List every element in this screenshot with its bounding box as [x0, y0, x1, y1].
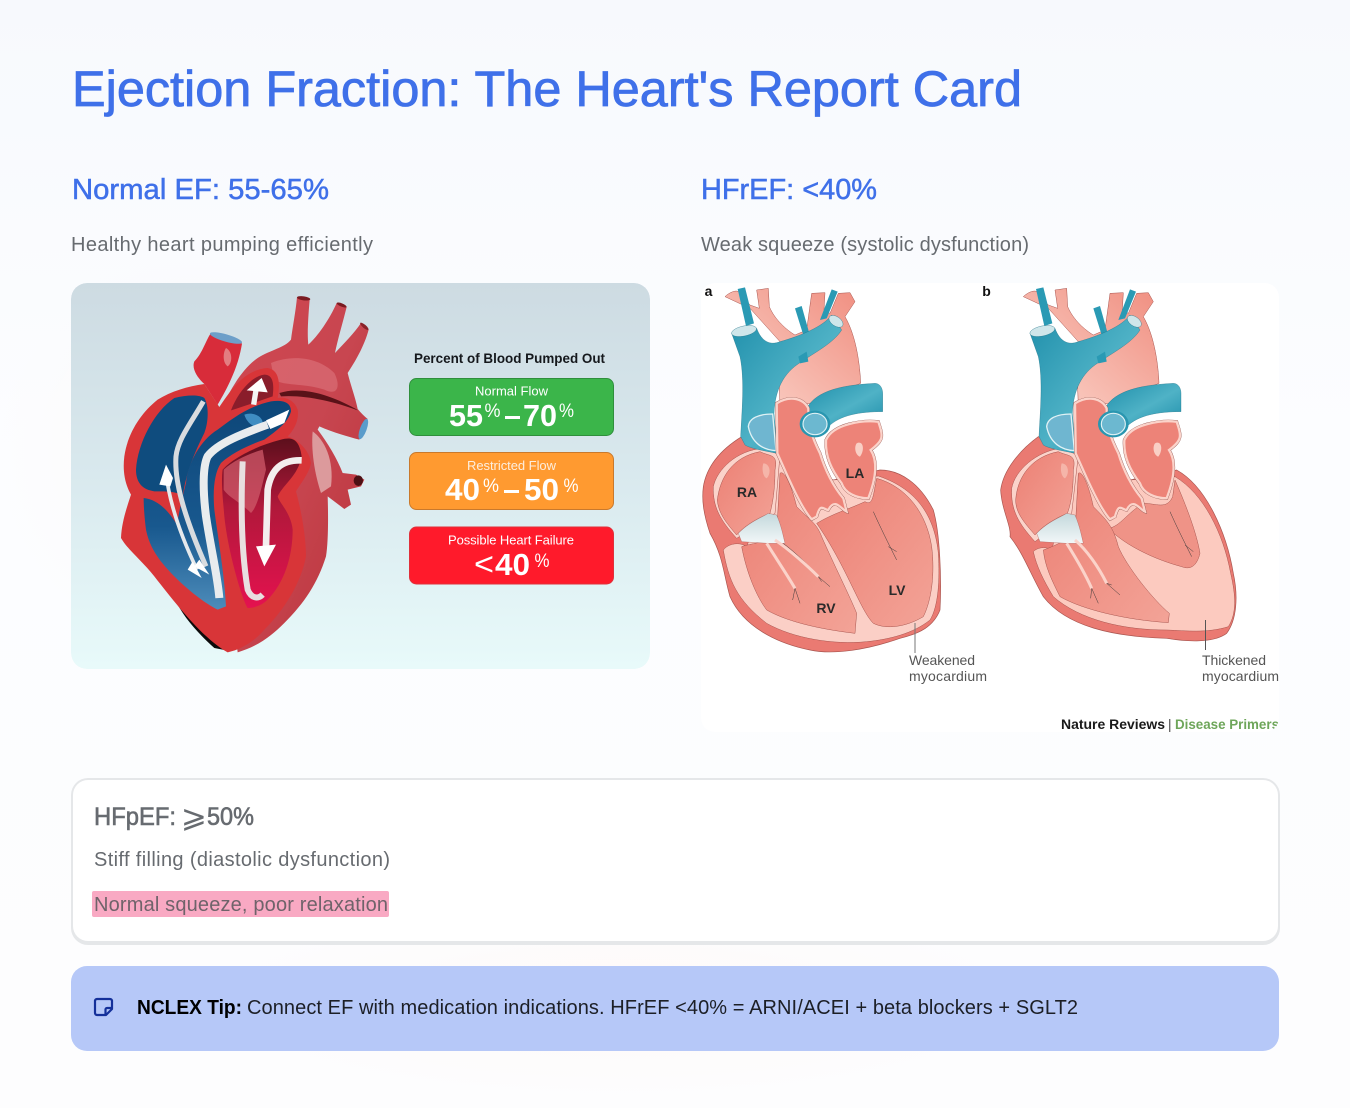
- badge: restricted flow: [410, 452, 614, 510]
- icon: sticky note: [95, 999, 112, 1015]
- badge: normal flow: %: [559, 401, 574, 422]
- heading: HFpEF: [94, 799, 254, 835]
- badge: possible heart failure: [410, 527, 614, 584]
- text: tip label: NCLEX Tip:: [137, 997, 242, 1019]
- labels: chambers: LV: [889, 582, 906, 598]
- text: tip body: Connect EF with medication indications. HFrEF <40% = ARNI/ACEI + beta blockers + SGLT2: [247, 997, 1078, 1019]
- badge: possible heart failure: Possible Heart Failure: [448, 532, 574, 548]
- text: HFpEF description: Stiff filling (diastolic dysfunction): [94, 849, 390, 871]
- credit: Nature Reviews: [1062, 719, 1278, 732]
- labels: chambers: [705, 283, 991, 616]
- caption: thickened myocardium: [1202, 652, 1279, 684]
- credit: Nature Reviews: Disease Primers: [1175, 717, 1279, 732]
- image panel: heart diagrams: [701, 283, 1279, 732]
- highlight: normal squeeze, poor relaxation: Normal squeeze, poor relaxation: [94, 894, 388, 916]
- labels: chambers: RV: [816, 600, 836, 616]
- text: HFrEF description: Weak squeeze (systolic dysfunction): [701, 234, 1029, 256]
- arrows: blood flow: [166, 388, 302, 598]
- badge: normal flow: 55: [449, 398, 483, 433]
- badge: restricted flow: 40: [445, 472, 480, 507]
- chart: percent of blood pumped out: [410, 350, 614, 584]
- panel: normal EF: [71, 174, 650, 669]
- badge: normal flow: 70: [523, 398, 557, 433]
- image panel: heart cross-section and flow chart: [71, 283, 650, 669]
- panel: HFrEF: [701, 174, 1279, 732]
- icon: anatomical heart: [121, 295, 370, 652]
- title: Ejection Fraction: The Heart's Report Card: [72, 61, 1022, 117]
- caption: thickened myocardium: myocardium: [1202, 668, 1279, 684]
- badge: normal flow: [410, 378, 614, 436]
- heading: normal EF: Normal EF: 55-65%: [72, 174, 329, 206]
- heading: HFrEF: HFrEF: <40%: [701, 174, 877, 206]
- chart title: Percent of Blood Pumped Out: [414, 350, 605, 366]
- callout: NCLEX tip: [71, 966, 1279, 1051]
- heading: HFpEF: ⩾: [181, 799, 207, 835]
- heading: HFpEF: 50%: [207, 803, 254, 831]
- text: normal EF description: Healthy heart pumping efficiently: [71, 234, 373, 256]
- badge: possible heart failure: 40: [495, 547, 530, 582]
- badge: restricted flow: %: [483, 476, 499, 497]
- icon: heart b, thickened myocardium: [1001, 287, 1236, 641]
- credit: Nature Reviews: |: [1168, 717, 1172, 732]
- caption: weakened myocardium: [909, 652, 987, 684]
- heading: HFpEF: HFpEF:: [94, 803, 176, 831]
- caption: weakened myocardium: Weakened: [909, 652, 975, 668]
- leader line: thickened myocardium: [1205, 620, 1206, 650]
- credit: Nature Reviews: Nature Reviews: [1061, 717, 1165, 732]
- labels: chambers: LA: [846, 465, 864, 481]
- badge: restricted flow: 50: [524, 472, 559, 507]
- badge: restricted flow: %: [564, 476, 579, 497]
- labels: chambers: b: [982, 283, 991, 299]
- badge: possible heart failure: <: [474, 546, 494, 582]
- labels: chambers: a: [705, 283, 713, 299]
- leader line: weakened myocardium: [914, 623, 916, 653]
- badge: possible heart failure: %: [534, 551, 550, 572]
- caption: thickened myocardium: Thickened: [1202, 652, 1266, 668]
- badge: restricted flow: Restricted Flow: [467, 458, 557, 473]
- badge: normal flow: %: [484, 401, 501, 422]
- caption: weakened myocardium: myocardium: [909, 668, 987, 684]
- badge: normal flow: Normal Flow: [475, 384, 549, 398]
- labels: chambers: RA: [737, 484, 757, 500]
- icon: heart a, weakened myocardium: [703, 287, 941, 652]
- panel: HFpEF card: [71, 778, 1280, 945]
